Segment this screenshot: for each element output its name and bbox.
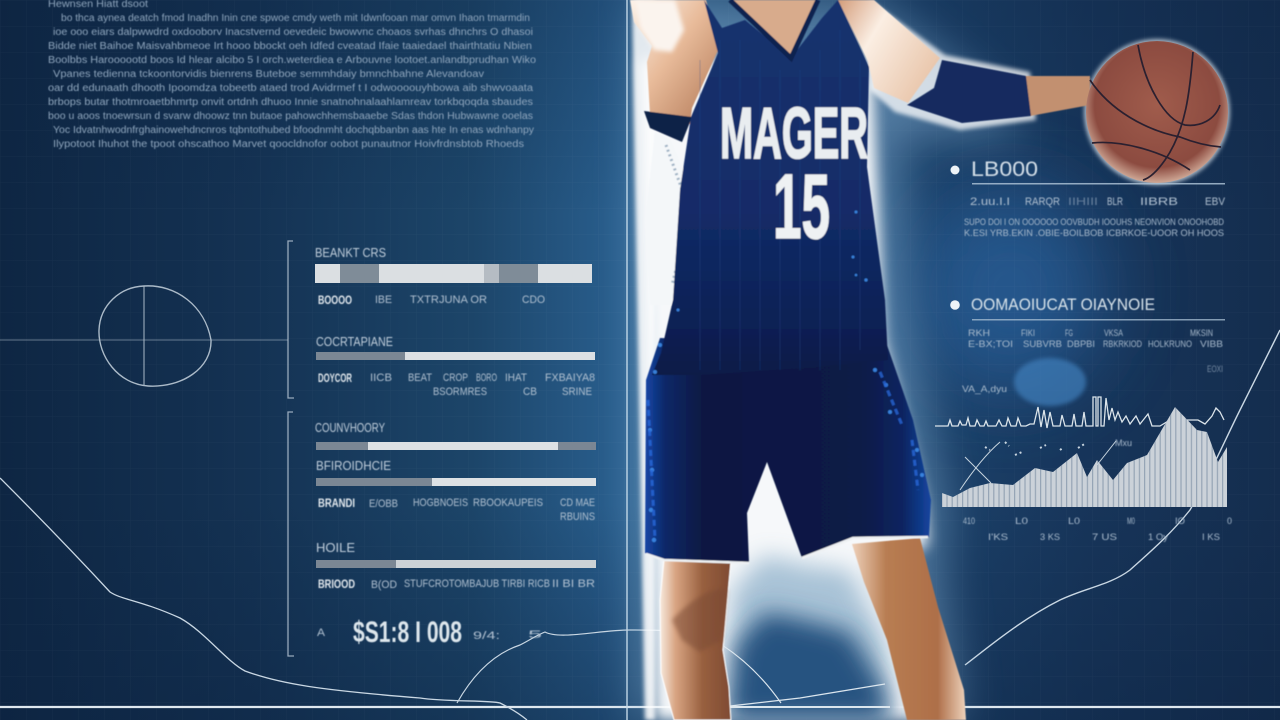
- mesh side panel: [645, 132, 693, 305]
- right leg: [852, 538, 966, 720]
- left text block: Vpanes tedienna tckoontorvidis bienrens Buteboe semmhdaiy bmnchbahne Alevandoav: [53, 69, 484, 80]
- left text block: brbops butar thotmroaetbhmrtp onvit ortdnh dhuoo Innie snatnohnalaahlamreav torkbqoqda sbaudes: [48, 97, 533, 108]
- heading: LB000: [971, 158, 1038, 181]
- row group 2: IHAT: [505, 372, 527, 384]
- row group 3: RBUINS: [560, 511, 595, 523]
- row group 2: BSORMRES: [433, 386, 487, 398]
- left text block: Bidde niet Baihoe Maisvahbmeoe Irt hooo bbockt oeh Idfed cveatad Ifaie taaiedael thairthtatiu Nbien: [48, 41, 532, 52]
- stat row: IIHIII: [1068, 196, 1098, 208]
- mesh pattern: [666, 145, 684, 285]
- column labels: FIKI: [1021, 328, 1035, 338]
- row group 3: CD MAE: [560, 497, 595, 509]
- stat row: 2.uu.I.I: [970, 196, 1010, 208]
- row group 2: DOYCOR: [318, 371, 352, 385]
- column labels: VKSA: [1104, 328, 1123, 338]
- column labels: VIBB: [1200, 339, 1223, 349]
- target circle diagram: [0, 286, 288, 386]
- fine print: SUPO DOI I ON OOOOOO OOVBUDH IOOUHS NEONVION ONOOHOBD: [964, 217, 1224, 227]
- left text block: Yoc Idvatnhwodnfrghainowehdncnros tqbntothubed bfoodnmht dochqbbanbn aas hte In enas wdnhanpy: [53, 125, 534, 136]
- row group 4: II BI BR: [552, 578, 595, 590]
- row group 2: CB: [523, 386, 537, 398]
- axis labels: 1 Oy: [1148, 532, 1169, 542]
- row group 4: [316, 540, 596, 591]
- row group 3: E/OBB: [369, 498, 398, 510]
- row group 2: BEAT: [408, 372, 432, 384]
- headline figure: 5: [528, 629, 542, 641]
- stat row: EBV: [1205, 196, 1226, 208]
- row group 1: BEANKT CRS: [315, 245, 386, 260]
- headline figure: $S1:8 I 008: [353, 616, 462, 649]
- spike line chart: [935, 397, 1224, 428]
- jersey pinstripes: [700, 30, 860, 370]
- row group 4: B(OD: [371, 579, 397, 591]
- heading: OOMAOIUCAT OIAYNOIE: [971, 295, 1155, 314]
- shorts hem: [646, 537, 928, 563]
- stat row: BLR: [1107, 196, 1123, 208]
- row group 3: BRANDI: [318, 496, 355, 510]
- row group 3: [315, 420, 596, 523]
- player: [630, 0, 1090, 720]
- column labels: RKH: [968, 328, 990, 338]
- left text block: [48, 0, 536, 150]
- row group 1: CDO: [522, 294, 545, 306]
- row group 2: COCRTAPIANE: [316, 334, 393, 349]
- shorts: [645, 338, 931, 563]
- forearm: [1026, 76, 1090, 116]
- left text block: boo u aoos tnoewrsun d svarw dhoowz tnn butaoe pahowchhemsbaaebe Sdas thdon Hubwawne ooelas: [48, 111, 533, 122]
- rule: [972, 319, 1225, 320]
- stat row: IIBRB: [1140, 196, 1178, 208]
- axis labels: L0: [1015, 516, 1028, 526]
- stat row: RARQR: [1025, 196, 1060, 208]
- row group 1: BOOOO: [318, 293, 352, 307]
- armpit trim: [644, 111, 692, 142]
- axis labels: IO: [1175, 516, 1185, 526]
- highlight sleeve: [635, 0, 684, 52]
- panel: upper right stats: [950, 158, 1226, 238]
- left text block: oar dd edunaath dhooth Ipoomdza tobeetb ataed trod Avidrmef t I odwoooouyhbowa aib shwvoaata: [48, 83, 533, 94]
- row group 1: TXTRJUNA OR: [410, 294, 487, 306]
- headline figure: A: [317, 627, 326, 639]
- jersey wordmark: MAGER: [720, 94, 868, 174]
- figure glow: [632, 0, 1230, 720]
- panel: lower right chart: [935, 295, 1232, 542]
- column labels: FG: [1065, 328, 1073, 338]
- jersey: [652, 0, 888, 375]
- blue highlight blob: [1014, 358, 1086, 406]
- column labels: DBPBI: [1067, 339, 1095, 349]
- row group 2: SRINE: [562, 386, 592, 398]
- axis labels: 410: [963, 516, 975, 526]
- left text block: Boolbbs Haroooootd boos Id hlear alcibo 5 I orch.weterdiea e Arbouvne lootoet.anlandbprudhan Wiko: [48, 55, 536, 66]
- axis labels: I'KS: [988, 532, 1008, 542]
- raised left arm: [630, 0, 719, 124]
- column labels: SUBVRB: [1023, 339, 1062, 349]
- column labels: [968, 328, 1223, 349]
- row group 1: [315, 245, 592, 307]
- axis labels: M0: [1127, 516, 1135, 526]
- jersey collar: [730, 0, 818, 58]
- shaded gap between legs: [728, 612, 890, 720]
- column labels: E-BX;TOI: [968, 339, 1013, 349]
- panel: upper right stats: K.ESI YRB.EKIN .OBIE-BOILBOB ICBRKOE-UOOR OH HOOS: [964, 228, 1224, 238]
- row group 4: STUFCROTOMBAJUB TIRBI RICB: [404, 578, 550, 590]
- row group 4: BRIOOD: [318, 577, 355, 591]
- soft haze between legs: [728, 555, 890, 720]
- left leg: [660, 560, 731, 720]
- bullet: [950, 166, 960, 174]
- axis labels: 7 US: [1092, 532, 1117, 542]
- row group 2: BORO: [476, 372, 497, 384]
- spark label: VA_A,dyu: [962, 384, 1007, 394]
- small chart labels: EOXI: [1207, 364, 1223, 374]
- axis labels: 0: [1227, 516, 1232, 526]
- axis labels: 3 KS: [1040, 532, 1060, 542]
- jersey number: 15: [773, 156, 830, 258]
- row group 2: FXBAIYA8: [545, 372, 595, 384]
- panel: stats bars: [315, 245, 596, 649]
- scatter annotations: [960, 441, 1116, 490]
- annotation label: Mxu: [1115, 438, 1132, 448]
- stat row: [970, 196, 1226, 208]
- rule: [972, 183, 1225, 184]
- axis labels: [963, 516, 1232, 542]
- basketball: [1086, 41, 1228, 183]
- row group 3: RBOOKAUPEIS: [473, 497, 543, 509]
- left text block: ioe ooo eiars dalpwwdrd oxdooborv Inacstvernd oevedeic bwowvnc choaos svrhas dhnchrs O dhasoi: [53, 27, 533, 38]
- row group 1: IBE: [375, 294, 392, 306]
- knee shadow: [672, 589, 727, 652]
- axis labels: I KS: [1202, 532, 1220, 542]
- right upper arm: [838, 0, 940, 103]
- row group 4: HOILE: [316, 540, 355, 555]
- armband: [907, 60, 1031, 123]
- row group 2: CROP: [443, 372, 468, 384]
- bullet: [950, 300, 960, 310]
- axis labels: L0: [1068, 516, 1080, 526]
- area chart: [942, 407, 1227, 507]
- row group 2: IICB: [370, 372, 392, 384]
- left text block: Ilypotoot Ihuhot the tpoot ohscathoo Marvet qoocldnofor oobot punautnor Hoivfrdnsbtob Rhoeds: [53, 139, 524, 150]
- row group 3: HOGBNOEIS: [413, 497, 468, 509]
- headline figure: [317, 616, 542, 649]
- sequin highlights: [648, 210, 924, 542]
- neck: [730, 0, 818, 58]
- column labels: MKSIN: [1190, 328, 1213, 338]
- row group 2: [316, 334, 595, 398]
- row group 3: BFIROIDHCIE: [316, 458, 391, 473]
- bracket lines: [288, 241, 294, 656]
- row group 3: COUNVHOORY: [315, 420, 385, 435]
- left text block: bo thca aynea deatch fmod Inadhn Inin cne spwoe cmdy weth mit Idwnfooan mar omvn Ihaon tmarmdin: [61, 13, 530, 24]
- column labels: RBKRKIOD: [1103, 339, 1142, 349]
- lines seen between legs: [722, 645, 890, 707]
- headline figure: 9/4:: [473, 630, 500, 642]
- column labels: HOLKRUNO: [1148, 339, 1192, 349]
